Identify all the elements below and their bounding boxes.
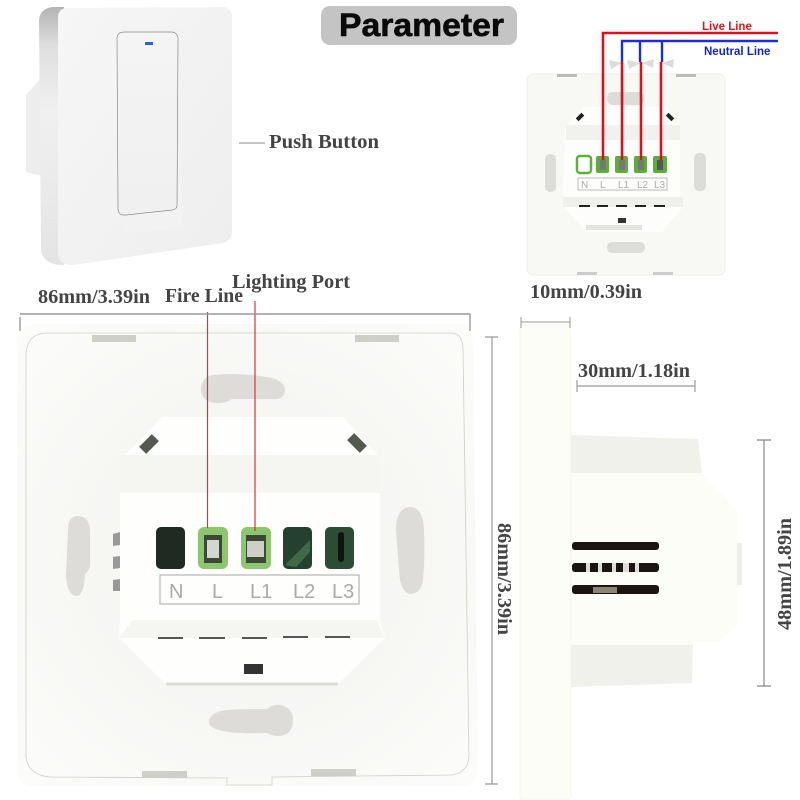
- dimension: module depth: [577, 360, 695, 392]
- callout: fire line: Fire Line: [165, 285, 243, 307]
- icon: push button switch front view: [26, 7, 232, 265]
- terminal labels: L1: [618, 180, 630, 191]
- terminal labels: [160, 575, 359, 604]
- terminals: [577, 156, 667, 173]
- dimension: plate width: [20, 286, 470, 331]
- live line: [603, 21, 778, 160]
- terminal labels: L2: [637, 180, 649, 191]
- terminal labels: N: [581, 180, 588, 191]
- panel: large back plate: [17, 324, 478, 786]
- terminal labels: L1: [250, 581, 272, 603]
- dimension: plate height: 86mm/3.39in: [493, 523, 515, 635]
- terminal labels: L: [212, 581, 223, 603]
- dimension: module depth: 30mm/1.18in: [578, 360, 690, 382]
- panel: side view: [520, 325, 742, 800]
- terminal labels: [578, 178, 667, 191]
- terminal labels: L3: [332, 581, 354, 603]
- title: Parameter: Parameter: [339, 7, 504, 43]
- vent slots: [572, 542, 659, 594]
- wiring diagram: switch back with live and neutral lines: [527, 21, 778, 275]
- terminal module: [119, 417, 385, 684]
- dimension: module height: 48mm/1.89in: [774, 518, 796, 630]
- side vents: [113, 532, 120, 591]
- live line: Live Line: [702, 21, 752, 33]
- wire connectors: [609, 59, 674, 69]
- mounting slots: [66, 374, 424, 736]
- terminal labels: N: [169, 581, 183, 603]
- terminal labels: L2: [293, 581, 315, 603]
- terminal windows: [156, 527, 354, 569]
- terminal labels: L: [600, 180, 606, 191]
- dimension: plate width: 86mm/3.39in: [38, 286, 150, 308]
- dimension: module height: [757, 440, 796, 686]
- callout: lighting port: Lighting Port: [232, 271, 350, 293]
- dimension: plate depth: [521, 281, 642, 328]
- dimension: plate depth: 10mm/0.39in: [530, 281, 642, 303]
- callout: push button: Push Button: [269, 131, 379, 153]
- terminal labels: L3: [654, 180, 666, 191]
- clips: [92, 335, 399, 778]
- neutral line: [622, 41, 778, 62]
- neutral line: Neutral Line: [704, 46, 770, 58]
- dimension: plate height: [485, 337, 515, 784]
- small back plate: [527, 74, 725, 275]
